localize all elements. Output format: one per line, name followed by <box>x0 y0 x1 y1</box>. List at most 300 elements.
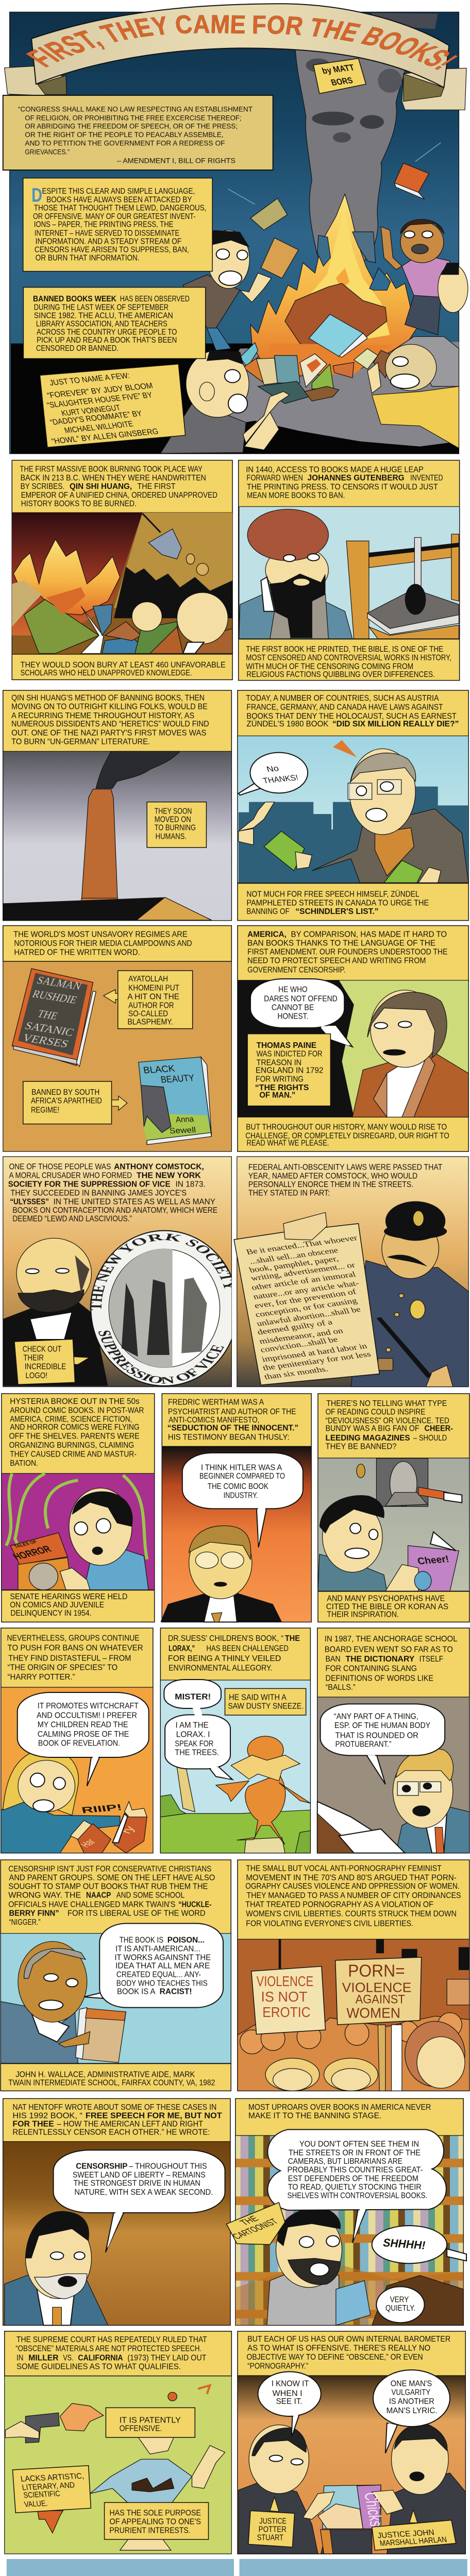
illustration: scared boy with horror comic <box>2 1473 155 1590</box>
caption box: burning humans <box>147 802 206 848</box>
panel: america and thomas paine <box>238 926 468 1151</box>
panel: the dictionary: “BALLS.” <box>325 1683 356 1692</box>
panel: nat hentoff <box>3 2098 230 2325</box>
panel: unsavory regimes <box>3 926 231 1151</box>
speech bubble: censorship drive <box>54 2150 225 2252</box>
illustration: bundy reading cheer magazine: Cheer! <box>416 1553 450 1567</box>
callout: lacks artistic value: LITERARY, AND <box>22 2480 75 2492</box>
panel: comics hysteria: OFF THE SHELVES. PARENTS WERE <box>9 1432 140 1440</box>
illustration: cartoonist in library <box>236 2136 463 2325</box>
panel: miller vs california: IN <box>16 2353 23 2362</box>
illustration: scared boy with horror comic: HORROR <box>11 1544 54 1562</box>
document: statute excerpt: other article of an immoral <box>250 1269 357 1292</box>
quote: first amendment: “CONGRESS SHALL MAKE NO LAW RESPECTING AN ESTABLISHMENT <box>18 106 253 113</box>
callout: thomas paine: THOMAS PAINE <box>257 1041 316 1050</box>
byline note: BORS <box>330 76 354 88</box>
panel: burning humans: NUMEROUS DISSIDENTS AND “HERETICS” WOULD FIND <box>11 719 209 728</box>
callout: ayatollah khomeini: A HIT ON THE <box>127 992 179 1001</box>
protest sign: porn equals violence <box>335 1957 422 2025</box>
speech bubble: one man's vulgarity: VULGARITY <box>392 2387 430 2397</box>
book: black beauty: Sewell <box>169 1125 196 1136</box>
speech bubble: censorship drive: SWEET LAND OF LIBERTY – REMAINS <box>73 2171 206 2179</box>
panel: qin shi huang: EMPEROR OF A UNIFIED CHINA, ORDERED UNAPPROVED <box>21 490 217 500</box>
panel: burning humans: A RECURRING THEME THROUGHOUT HISTORY, AS <box>11 711 194 720</box>
panel: qin shi huang: THE FIRST <box>138 482 175 491</box>
panel: zundel: “SCHINDLER'S LIST.” <box>295 907 378 916</box>
panel: internal barometer <box>238 2331 465 2554</box>
panel: burning humans: QIN SHI HUANG'S METHOD OF BANNING BOOKS, THEN <box>11 693 205 702</box>
note: just to name a few: “SLAUGHTER HOUSE FIVE” BY <box>46 390 154 410</box>
speech bubble: book is poison: IT IS ANTI-AMERICAN... <box>115 1944 200 1953</box>
illustration: man reading dictionary <box>317 1697 469 1853</box>
illustration: comstock portrait <box>3 1238 108 1386</box>
panel: huckleberry finn: “HUCKLE- <box>178 1900 211 1909</box>
speech bubble: witchcraft: BOOK OF REVELATION. <box>38 1738 120 1748</box>
panel: miller vs california <box>5 2331 231 2554</box>
panel: harry potter: “THE ORIGIN OF SPECIES” TO <box>8 1663 118 1672</box>
panel: nat hentoff: – HOW THE AMERICAN LEFT AND RIGHT <box>57 2119 203 2128</box>
panel: comics hysteria: HYSTERIA BROKE OUT IN THE 50s <box>10 1397 140 1406</box>
panel: zundel <box>238 690 468 921</box>
arrow: right <box>112 1096 127 1110</box>
panel: fredric wertham <box>160 1394 311 1622</box>
panel: the dictionary: THE DICTIONARY <box>345 1654 415 1664</box>
label: justice potter stuart: STUART <box>257 2533 283 2542</box>
panel: burning humans: TO BURN “UN-GERMAN” LITERATURE. <box>11 737 150 746</box>
callout: ayatollah khomeini: SO-CALLED <box>128 1009 168 1018</box>
text box: despite this clear language: INFORMATION. AND A STEADY STREAM OF <box>36 236 181 246</box>
caption: he said with a saw dusty sneeze: SAW DUSTY SNEEZE. <box>228 1702 304 1710</box>
document: statute excerpt: nature...or any article what- <box>251 1279 360 1301</box>
quote: first amendment: OR ABRIDGING THE FREEDOM OF SPEECH, OR OF THE PRESS; <box>25 122 238 130</box>
caption box: burning humans: TO BURNING <box>155 823 196 832</box>
speech bubble: book is poison: BOOK IS A <box>117 1987 156 1996</box>
text box: banned books week: LIBRARY ASSOCIATION, AND TEACHERS <box>36 319 167 328</box>
logo: new york society seal: SUPPRESSION OF VICE <box>98 1330 224 1384</box>
speech bubble: i am the lorax: LORAX. I <box>176 1730 210 1739</box>
illustration: gutenberg and printing press <box>239 506 460 639</box>
speech bubble: i know it when i see it: SEE IT. <box>276 2397 303 2406</box>
panel: nat hentoff: HIS 1992 BOOK, “ <box>12 2111 82 2120</box>
panel: the dictionary: BAN <box>325 1654 341 1664</box>
panel: comics hysteria: AROUND COMIC BOOKS. IN POST-WAR <box>10 1406 144 1415</box>
callout: prurient interests: HAS THE SOLE PURPOSE <box>109 2509 201 2517</box>
banner left tail <box>5 66 66 95</box>
speech bubble: he who dares: HONEST. <box>277 1011 308 1021</box>
speech bubble: he who dares: HE WHO <box>278 985 308 994</box>
panel: comics hysteria: DELINQUENCY IN 1954. <box>10 1608 92 1618</box>
illustration: wertham portrait <box>160 1446 311 1622</box>
speech bubble: book is poison <box>84 1923 223 2008</box>
illustration: police officer <box>351 1201 468 1387</box>
banner arch <box>31 4 449 88</box>
speech bubble: he who dares <box>250 979 352 1047</box>
caption: he said with a saw dusty sneeze <box>225 1688 306 1715</box>
panel: anthony comstock: SOCIETY FOR THE SUPPRESSION OF VICE <box>8 1179 171 1189</box>
label: justice potter stuart: POTTER <box>259 2524 287 2534</box>
panel: huckleberry finn: OFFICIALS HAVE CHALLENGED MARK TWAIN'S <box>8 1900 175 1909</box>
illustration: two justices with magazine: Chicks <box>360 2492 387 2527</box>
panel: fredric wertham: PSYCHIATRIST AND AUTHOR OF THE <box>168 1407 296 1416</box>
panel: anthony comstock: ANTHONY COMSTOCK, <box>114 1162 204 1171</box>
arrow: left <box>104 990 120 1003</box>
panel: gutenberg: MEAN MORE BOOKS TO BAN. <box>247 491 345 500</box>
panel: ted bundy: THEIR INSPIRATION. <box>327 1609 399 1619</box>
illustration: chimney with smoke <box>3 751 231 921</box>
illustration: bundy reading cheer magazine <box>318 1458 469 1591</box>
text box: banned books week: CENSORED OR BANNED. <box>36 344 119 353</box>
label: justice john marshall harlan <box>372 2510 456 2550</box>
book held up <box>261 238 298 278</box>
speech bubble: i know it when i see it: I KNOW IT <box>272 2379 309 2388</box>
panel: miller vs california: VS. <box>63 2353 74 2362</box>
panel: harry potter: “HARRY POTTER.” <box>8 1672 75 1682</box>
panel: comics hysteria: THEY CAUSED CRIME AND MASTUR- <box>10 1449 137 1459</box>
speech bubble: mister: MISTER! <box>175 1692 211 1701</box>
text box: banned books week: SINCE 1982. THE ACLU, THE AMERICAN <box>34 311 173 320</box>
panel: huckleberry finn: JOHN H. WALLACE, ADMINISTRATIVE AIDE, MARK <box>15 2070 195 2079</box>
speech bubble: any part of a thing <box>321 1704 445 1784</box>
document: statute excerpt: Be it enacted...That whoever <box>245 1233 359 1256</box>
panel: huckleberry finn: “NIGGER.” <box>9 1918 41 1927</box>
callout: thomas paine: ENGLAND IN 1792 <box>256 1066 323 1075</box>
note: just to name a few: “DADDY'S ROOMMATE” BY <box>49 409 143 427</box>
speech bubble: very quietly <box>376 2286 425 2323</box>
note: just to name a few <box>40 364 186 447</box>
book: satanic verses: THE <box>36 1008 60 1022</box>
panel: nat hentoff: RELENTLESSLY CENSOR EACH OTHER.” HE WROTE: <box>12 2127 210 2137</box>
panel: comics hysteria: ORGANIZING BURNINGS, CLAIMING <box>9 1440 134 1450</box>
panel: comics hysteria: SENATE HEARINGS WERE HELD <box>10 1592 127 1601</box>
speech bubble: book is poison: POISON... <box>167 1936 205 1944</box>
note: check out their logo: LOGO! <box>25 1371 47 1380</box>
speech bubble: hitler was a beginner: INDUSTRY. <box>224 1490 258 1500</box>
panel: miller vs california: MILLER <box>28 2353 59 2362</box>
text box: despite this clear language: D <box>31 184 42 206</box>
callout: ayatollah khomeini: KHOMEINI PUT <box>128 984 179 992</box>
illustration: hentoff portrait <box>3 2142 230 2325</box>
speech bubble: very quietly: VERY <box>390 2295 409 2304</box>
speech bubble: book is poison: THE BOOK IS <box>120 1936 163 1944</box>
panel: zundel: BANNING OF <box>246 907 290 916</box>
panel: miller vs california: “OBSCENE” MATERIALS ARE NOT PROTECTED SPEECH. <box>15 2344 202 2353</box>
speech bubble: censorship drive: CENSORSHIP <box>76 2161 127 2171</box>
panel: comics hysteria <box>2 1394 155 1622</box>
panel: huckleberry finn: CENSORSHIP ISN'T JUST FOR CONSERVATIVE CHRISTIANS <box>8 1864 211 1873</box>
character: man at right edge <box>438 263 468 313</box>
speech bubble: witchcraft: CALMING PROSE OF THE <box>38 1730 129 1739</box>
panel: gutenberg <box>239 460 460 681</box>
text box: banned books week: DURING THE LAST WEEK OF SEPTEMBER <box>34 303 169 312</box>
caption box: burning humans: MOVED ON <box>155 815 191 824</box>
panel: ted bundy <box>318 1394 469 1622</box>
label: the cartoonist: THE <box>237 2214 261 2227</box>
protest sign: porn equals violence: WOMEN <box>346 2006 400 2021</box>
illustration: two justices with magazine <box>238 2376 465 2554</box>
document: statute excerpt: misdemeanor, and on <box>258 1326 345 1346</box>
panel: comics hysteria: ON COMICS AND JUVENILE <box>10 1600 104 1609</box>
panel: the lorax: FOR BEING A THINLY VEILED <box>168 1654 281 1663</box>
panel: anthony comstock: IN THE UNITED STATES AS WELL AS MANY <box>54 1197 215 1206</box>
panel: harry potter: TO PUSH FOR BANS ON WHATEVER <box>8 1643 143 1652</box>
note: just to name a few: “FOREVER” BY JUDY BLOOM <box>46 381 154 400</box>
panel: unsavory regimes: THE WORLD'S MOST UNSAVORY REGIMES ARE <box>13 929 188 939</box>
callout: patently offensive <box>106 2408 195 2437</box>
speech bubble: witchcraft: IT PROMOTES WITCHCRAFT <box>38 1701 139 1710</box>
speech bubble: censorship drive: THE STRONGEST DRIVE IN HUMAN <box>74 2179 200 2188</box>
panel: anthony comstock: “ULYSSES” <box>10 1197 49 1206</box>
document: statute excerpt: deemed guilty of a <box>256 1317 334 1336</box>
panel: qin shi huang: BY SCRIBES. <box>21 482 64 491</box>
title text: FIRST, THEY CAME FOR THE BOOKS! <box>26 15 458 70</box>
panel: anthony comstock: IN 1873. <box>175 1179 206 1189</box>
panel: book burning scene <box>10 12 468 454</box>
panel: america and thomas paine: AMERICA, <box>247 929 287 939</box>
panel: anthony comstock: A MORAL CRUSADER WHO FORMED <box>9 1171 132 1180</box>
panel: harry potter <box>1 1628 153 1853</box>
panel: huckleberry finn: AND PARENT GROUPS. SOME ON THE LEFT HAVE ALSO <box>9 1873 215 1882</box>
panel: internal barometer: “PORNOGRAPHY.” <box>247 2362 308 2370</box>
panel: unsavory regimes: NOTORIOUS FOR THEIR MEDIA CLAMPDOWNS AND <box>14 939 192 948</box>
panel: huckleberry finn: AND SOME SCHOOL <box>116 1890 184 1900</box>
panel: federal anti-obscenity laws: THEY STATED IN PART: <box>248 1189 330 1197</box>
illustration: gun and figure <box>5 2385 225 2550</box>
caption box: burning humans: HUMANS. <box>155 832 187 841</box>
panel: fredric wertham: HIS TESTIMONY BEGAN THUSLY: <box>168 1432 290 1442</box>
callout: lacks artistic value: LACKS ARTISTIC, <box>20 2471 85 2483</box>
speech bubble: witchcraft <box>18 1692 149 1786</box>
illustration: burning book and buried scholars <box>12 513 232 654</box>
speech bubble: i know it when i see it: WHEN I <box>272 2389 303 2398</box>
panel: burning humans <box>3 690 231 921</box>
panel: nat hentoff: NAT HENTOFF WROTE ABOUT SOME OF THESE CASES IN <box>12 2103 216 2112</box>
panel: the lorax: LORAX,” <box>169 1643 195 1653</box>
callout: ayatollah khomeini: AYATOLLAH <box>128 974 168 984</box>
panel: huckleberry finn: TWAIN INTERMEDIATE SCHOOL, FAIRFAX COUNTY, VA, 1982 <box>8 2078 215 2087</box>
panel: anthony comstock: ONE OF THOSE PEOPLE WAS <box>9 1162 111 1171</box>
protest sign: violence is not erotic <box>251 1967 325 2034</box>
illustration: john wallace with book <box>1 1934 231 2063</box>
speech bubble: censorship drive: NATURE, WITH SEX A WEAK SECOND. <box>74 2188 213 2197</box>
panel: federal anti-obscenity laws <box>234 1157 468 1387</box>
panel: comics hysteria: BATION. <box>10 1459 38 1468</box>
speech bubble: he who dares: CANNOT BE <box>272 1003 314 1012</box>
label: justice potter stuart: JUSTICE <box>259 2516 287 2526</box>
text box: banned books week <box>23 287 206 359</box>
document: statute excerpt: unlawful abortion...shall be <box>255 1304 362 1328</box>
callout: prurient interests <box>105 2502 208 2539</box>
callout: thomas paine <box>247 1034 330 1106</box>
speech bubble: i am the lorax: SPEAK FOR <box>175 1739 213 1748</box>
illustration: lorax on stump <box>160 1680 310 1853</box>
panel: miller vs california: SOME GUIDELINES AS TO WHAT QUALIFIES. <box>16 2362 181 2371</box>
panel: the lorax: HAS BEEN CHALLENGED <box>206 1643 289 1653</box>
document: statute excerpt: conception, or for causing <box>254 1296 359 1319</box>
document: statute excerpt: the penitentiary for not less <box>261 1349 372 1372</box>
speech bubble: book is poison: CREATED EQUAL... ANY- <box>116 1970 201 1979</box>
character: grey haired woman <box>367 336 459 448</box>
quote: first amendment <box>3 95 273 170</box>
speech bubble: librarians <box>267 2129 446 2243</box>
book: satanic verses <box>12 969 96 1066</box>
label: the cartoonist <box>226 2202 285 2245</box>
callout: lacks artistic value: SCIENTIFIC <box>23 2489 61 2500</box>
document: statute excerpt: imprisoned at hard labor in <box>260 1341 368 1364</box>
speech bubble: no thanks: THANKS! <box>262 773 299 785</box>
protest sign: porn equals violence: VIOLENCE <box>342 1980 412 1995</box>
panel: fredric wertham: FREDRIC WERTHAM WAS A <box>168 1398 264 1406</box>
speech bubble: i know it when i see it <box>258 2371 321 2437</box>
book: black beauty: Anna <box>175 1114 194 1124</box>
panel: unsavory regimes: HATRED OF THE WRITTEN WORD. <box>14 947 140 957</box>
callout: thomas paine: TREASON IN <box>257 1058 301 1067</box>
speech bubble: witchcraft: MY CHILDREN READ THE <box>38 1720 128 1729</box>
panel: anthony comstock <box>3 1156 232 1387</box>
speech bubble: no thanks: No <box>265 764 280 774</box>
illustration: thomas paine portrait <box>238 980 468 1117</box>
panel: america and thomas paine: GOVERNMENT CENSORSHIP. <box>247 965 345 974</box>
panel: ted bundy: THEY BE BANNED? <box>325 1442 396 1451</box>
panel: gutenberg: FORWARD WHEN <box>246 473 303 482</box>
text box: despite this clear language: IONS – PAPER, THE PRINTING PRESS, THE <box>34 220 173 229</box>
book: satanic verses: SALMAN <box>35 974 83 992</box>
illustration: woman ripping book: ry <box>118 1824 138 1835</box>
panel: miller vs california: CALIFORNIA <box>78 2353 123 2362</box>
callout: thomas paine: OF MAN.” <box>259 1091 295 1099</box>
caption box: burning humans: THEY SOON <box>155 806 192 816</box>
flying book <box>228 143 441 230</box>
panel: nat hentoff: FREE SPEECH FOR ME, BUT NOT <box>86 2111 222 2120</box>
speech bubble: book is poison: IT WORKS AGAINSNT THE <box>114 1953 211 1962</box>
book: black beauty <box>139 1057 211 1145</box>
panel: the dictionary: ITSELF <box>419 1654 443 1664</box>
quote: first amendment: OF RELIGION, OR PROHIBITING THE FREE EXCERCISE THEREOF; <box>25 114 242 122</box>
speech bubble: mister <box>164 1680 221 1708</box>
panel: comics hysteria: AMERICA, CRIME, SCIENCE FICTION, <box>10 1414 132 1423</box>
text box: despite this clear language <box>23 178 212 272</box>
callout: banned by south africa: AFRICA'S APARTHEID <box>31 1096 102 1105</box>
book: satanic verses: SATANIC <box>23 1020 76 1039</box>
panel: burning humans: MOVING ON TO OUTRIGHT KILLING FOLKS, WOULD BE <box>11 702 208 711</box>
text box: banned books week: BANNED BOOKS WEEK <box>33 294 116 303</box>
text box: banned books week: PICK UP AND READ A BOOK THAT'S BEEN <box>37 335 177 345</box>
character: mohawk man <box>160 350 290 453</box>
panel: qin shi huang: QIN SHI HUANG, <box>70 482 132 491</box>
panel: anthony comstock: BOOKS ON CONTRACEPTION AND ANATOMY, WHICH WERE <box>12 1206 217 1215</box>
text box: banned books week: ACROSS THE COUNTRY URGE PEOPLE TO <box>37 327 177 336</box>
protest sign: violence is not erotic: EROTIC <box>262 2005 310 2020</box>
speech bubble: shhhh <box>372 2226 466 2263</box>
callout: banned by south africa <box>23 1081 112 1124</box>
text box: despite this clear language: BOOKS HAVE ALWAYS BEEN ATTACKED BY <box>46 195 192 204</box>
title banner <box>4 3 467 110</box>
callout: lacks artistic value: VALUE. <box>24 2499 48 2509</box>
panel: america and thomas paine: READ WHAT WE PLEASE. <box>246 1138 329 1147</box>
panel: qin shi huang <box>12 460 232 680</box>
speech bubble: any part of a thing: PROTUBERANT.” <box>335 1740 392 1749</box>
protest sign: porn equals violence: PORN= <box>348 1961 405 1980</box>
panel: qin shi huang: THE FIRST MASSIVE BOOK BURNING TOOK PLACE WAY <box>20 465 203 473</box>
text box: despite this clear language: CENSORS HAVE ARISEN TO SUPPRESS, BAN, <box>35 245 189 254</box>
speech bubble: one man's vulgarity <box>373 2370 450 2453</box>
panel: harry potter: NEVERTHELESS, GROUPS CONTINUE <box>7 1633 140 1642</box>
speech bubble: book is poison: IDEA THAT ALL MEN ARE <box>115 1961 210 1970</box>
panel: the lorax: ENVIRONMENTAL ALLEGORY. <box>169 1663 272 1672</box>
protest sign: violence is not erotic: IS NOT <box>261 1989 308 2005</box>
panel: huckleberry finn: SOUGHT TO STAMP OUT BOOKS THAT RUB THEM THE <box>8 1882 208 1891</box>
panel: the lorax: DR.SUESS' CHILDREN'S BOOK, “ <box>168 1634 283 1643</box>
panel: huckleberry finn: BERRY FINN” <box>9 1908 59 1918</box>
panel: burning humans: OUT. ONE OF THE NAZI PARTY'S FIRST MOVES WAS <box>11 728 206 737</box>
callout: patently offensive: OFFENSIVE. <box>120 2424 162 2433</box>
illustration: zundel with pamphlets <box>238 736 468 883</box>
callout: prurient interests: OF APPEALING TO ONE'S <box>109 2517 201 2526</box>
panel: qin shi huang: HISTORY BOOKS TO BE BURNED. <box>21 499 137 508</box>
document: statute excerpt <box>234 1212 379 1385</box>
panel: the dictionary <box>317 1628 469 1853</box>
quote: first amendment: OR THE RIGHT OF THE PEOPLE TO PEACABLY ASSEMBLE, <box>25 131 224 139</box>
speech bubble: shhhh: SHHHH! <box>382 2236 427 2252</box>
smoke column <box>295 13 438 264</box>
text box: despite this clear language: OR BURN THAT INFORMATION. <box>36 253 140 262</box>
illustration: woman ripping book <box>1 1687 153 1853</box>
document: statute excerpt: conviction...shall be <box>259 1335 339 1354</box>
logo: new york society seal <box>90 1230 232 1386</box>
callout: patently offensive: IT IS PATENTLY <box>120 2415 181 2425</box>
panel: huckleberry finn <box>1 1860 231 2091</box>
callout: thomas paine: WAS INDICTED FOR <box>257 1049 323 1058</box>
panel: comics hysteria: AND HORROR COMICS WERE FLYING <box>10 1422 140 1432</box>
banner right tail <box>402 68 466 110</box>
text box: despite this clear language: ESPITE THIS CLEAR AND SIMPLE LANGUAGE, <box>42 187 195 196</box>
panel: fredric wertham: ANTI-COMICS MANIFESTO, <box>169 1415 259 1425</box>
book: black beauty: BEAUTY <box>160 1073 195 1085</box>
illustration: woman ripping book: RIIIP! <box>81 1803 123 1816</box>
fire <box>250 194 420 378</box>
callout: thomas paine: “THE RIGHTS <box>255 1083 309 1092</box>
callout: thomas paine: FOR WRITING <box>256 1074 304 1083</box>
label: justice potter stuart <box>248 2497 295 2547</box>
byline note <box>313 58 366 94</box>
note: check out their logo: CHECK OUT <box>23 1344 61 1353</box>
callout: ayatollah khomeini: BLASPHEMY. <box>127 1017 173 1026</box>
note: just to name a few: “HOWL” BY ALLEN GINSBERG <box>51 427 160 446</box>
text box: despite this clear language: OR OFFENSIVE. MANY OF OUR GREATEST INVENT- <box>33 212 195 221</box>
panel: fredric wertham: “SEDUCTION OF THE INNOCENT.” <box>167 1423 298 1432</box>
burning book pile <box>240 283 393 403</box>
speech bubble: he who dares: DARES NOT OFFEND <box>264 994 338 1003</box>
document: statute excerpt: ever, for the prevention of <box>253 1287 358 1310</box>
callout: ayatollah khomeini: AUTHOR FOR <box>128 1001 174 1010</box>
text box: banned books week: HAS BEEN OBSERVED <box>120 294 190 303</box>
panel: miller vs california: (1973) THEY LAID OUT <box>127 2353 206 2362</box>
panel: librarians <box>226 2098 466 2325</box>
quote: first amendment: AND TO PETITION THE GOVERNMENT FOR A REDRESS OF <box>25 140 225 147</box>
callout: banned by south africa: REGIME! <box>31 1105 59 1114</box>
character: angry thrower <box>183 230 272 350</box>
panel: the lorax <box>160 1628 310 1853</box>
panel: huckleberry finn: WRONG WAY. THE <box>8 1890 81 1900</box>
speech bubble: hitler was a beginner: BEGINNER COMPARED TO <box>199 1471 285 1481</box>
speech bubble: hitler was a beginner: I THINK HITLER WAS A <box>201 1463 282 1472</box>
panel: qin shi huang: SCHOLARS WHO HELD UNAPPROVED KNOWLEDGE. <box>21 668 192 677</box>
text box: despite this clear language: INTERNET – HAVE SERVED TO DISSEMINATE <box>35 228 179 238</box>
panel: anti-pornography feminists <box>238 1860 469 2091</box>
book: black beauty: BLACK <box>143 1063 176 1076</box>
speech bubble: witchcraft: AND OCCULTISM! I PREFER <box>37 1710 137 1720</box>
panel: nat hentoff: FOR THEE <box>12 2119 54 2128</box>
callout: banned by south africa: BANNED BY SOUTH <box>31 1088 99 1097</box>
